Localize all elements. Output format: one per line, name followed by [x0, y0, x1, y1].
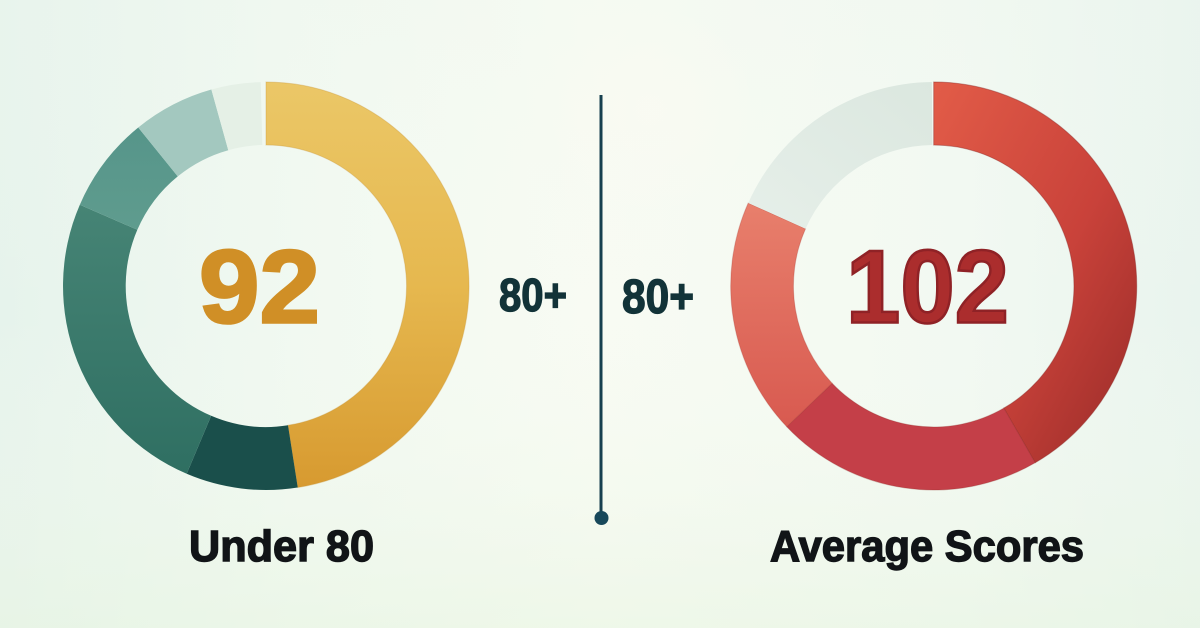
segment: light green	[138, 90, 228, 176]
value: 102: 102	[846, 230, 1009, 346]
value: 92: 92	[199, 230, 320, 346]
label: average scores: Average Scores	[770, 522, 1084, 571]
segment: crimson	[787, 383, 1035, 490]
segment: pale	[748, 82, 932, 229]
segment: salmon	[731, 203, 832, 427]
divider line with dot	[594, 95, 608, 525]
segment: medium green	[63, 205, 211, 474]
segment: gold	[266, 82, 469, 487]
segment: main red	[934, 82, 1137, 463]
donut chart: average scores	[731, 82, 1137, 490]
label: 80+ right: 80+	[622, 271, 694, 324]
segment: pale	[211, 82, 262, 150]
segment: dark teal	[187, 416, 298, 490]
segment: soft green	[80, 128, 178, 230]
label: under 80: Under 80	[189, 522, 374, 571]
label: 80+ left: 80+	[499, 269, 567, 321]
donut chart: under 80	[63, 82, 469, 490]
